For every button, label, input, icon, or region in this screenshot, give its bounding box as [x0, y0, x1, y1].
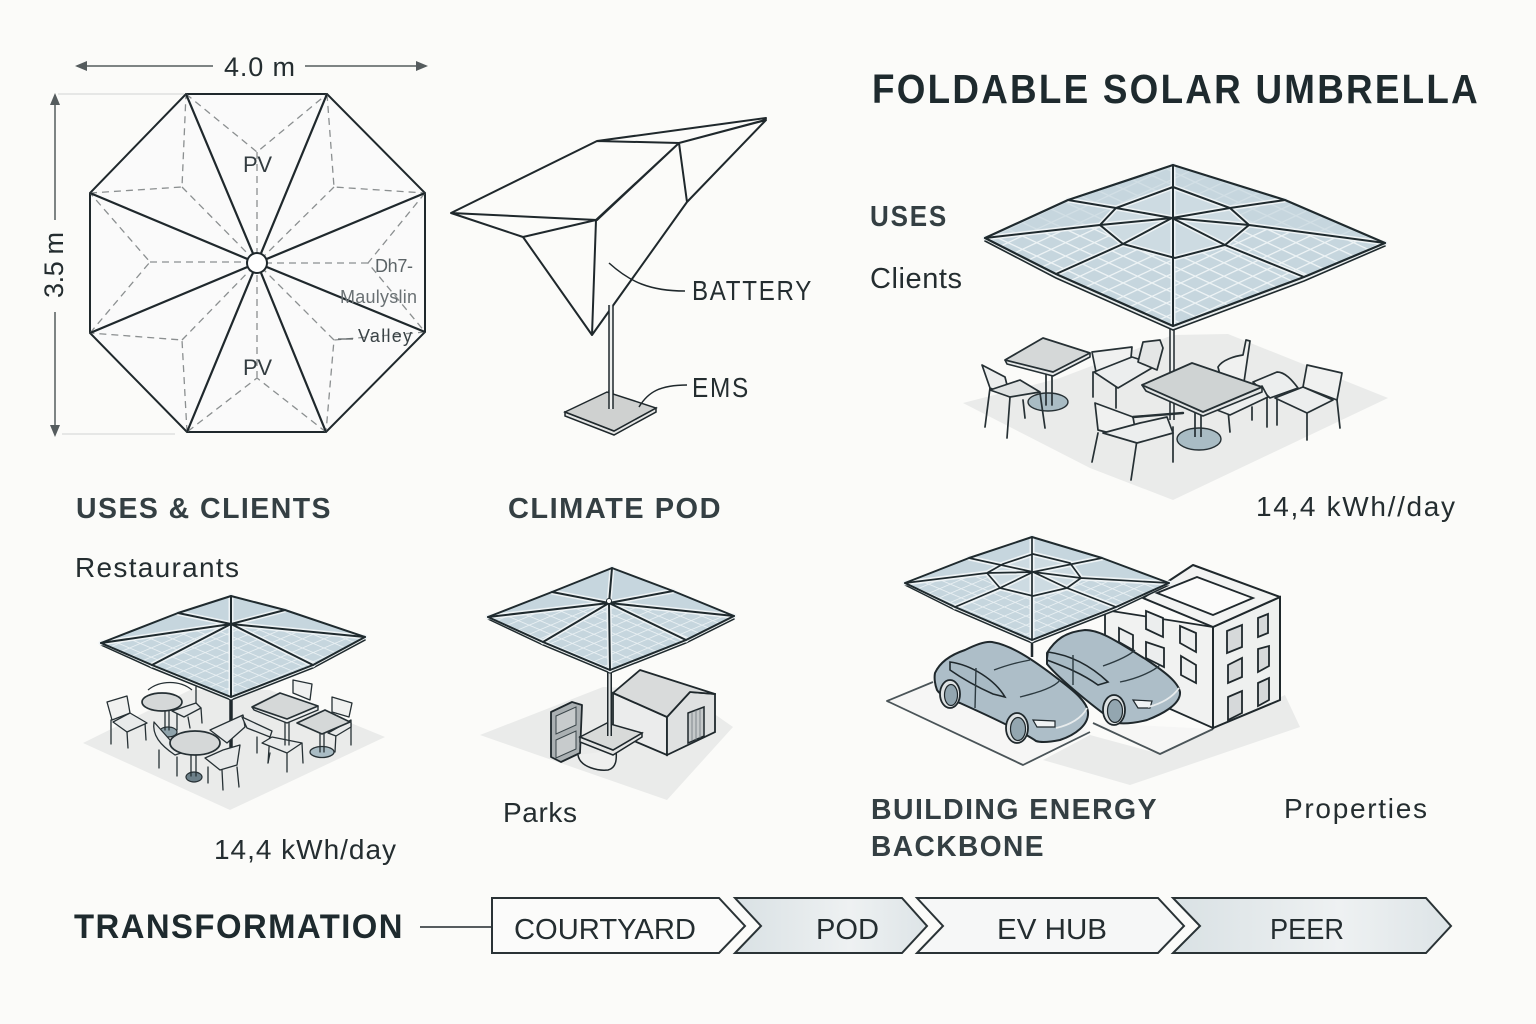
canopy with PV panels: [905, 537, 1169, 643]
canopy with PV panels: [101, 596, 365, 700]
table: centre: [1142, 363, 1262, 450]
car: rear: [1047, 630, 1180, 725]
ground shadow: [1043, 695, 1300, 785]
pole: [608, 305, 614, 409]
pole: [607, 668, 612, 736]
chair: far left: [107, 696, 147, 748]
dimension: height 3.5 m: 3.5 m: [39, 232, 69, 298]
folded canopy: [451, 118, 766, 335]
round table: front: [170, 731, 220, 782]
chevron: peer: [1173, 898, 1451, 953]
heading: uses and clients: USES & CLIENTS: [76, 493, 332, 525]
panel: climate pod umbrella: [480, 568, 734, 800]
chevron: pod: [735, 898, 927, 953]
pole: [229, 697, 233, 752]
building: [1105, 565, 1280, 728]
connector line: [420, 926, 492, 928]
label: restaurants: Restaurants: [75, 552, 239, 583]
panel: plan view with dimensions: [39, 52, 428, 437]
label: BATTERY: BATTERY: [692, 275, 813, 306]
car: front: [935, 642, 1088, 743]
heading: building energy backbone: BUILDING ENERGY: [871, 794, 1158, 826]
ground shadow: [480, 687, 733, 800]
label: Dh7: Dh7-: [375, 256, 413, 276]
dimension: width 4.0 m: [75, 52, 428, 82]
chevron: peer: PEER: [1270, 914, 1344, 946]
table: left: [1005, 338, 1090, 411]
chevron: pod: POD: [816, 914, 879, 946]
chair: right front: [262, 737, 303, 772]
canopy with PV panels: [488, 568, 734, 673]
label: EMS: EMS: [692, 372, 750, 403]
heading: transformation: TRANSFORMATION: [74, 908, 404, 946]
chair: lower middle: [205, 745, 240, 790]
chair: behind right of table: [1218, 340, 1250, 382]
pole: [1031, 640, 1033, 657]
panel: restaurant umbrella: [83, 596, 385, 810]
bench behind pole: [210, 715, 245, 743]
value: 14,4 kWh//day: 14,4 kWh//day: [1256, 491, 1455, 522]
label: parks: Parks: [503, 797, 577, 828]
chevron: courtyard: [492, 898, 745, 953]
chair: middle armchair: [1092, 340, 1163, 408]
label: Maulyslin: Maulyslin: [340, 287, 417, 307]
label: clients: Clients: [870, 263, 962, 295]
chair: behind round table: [172, 687, 202, 730]
heading: climate pod: CLIMATE POD: [508, 493, 722, 525]
base plate: [565, 390, 656, 435]
leader: EMS: [639, 385, 687, 407]
value: 14,4 kWh/day: 14,4 kWh/day: [214, 834, 396, 865]
parking pads: [887, 682, 1213, 765]
label: PV bottom: PV: [243, 355, 272, 380]
chair: left: [982, 365, 1045, 438]
chair: middle right: [242, 717, 272, 763]
chevron: ev hub: EV HUB: [997, 914, 1107, 946]
chevron: courtyard: COURTYARD: [514, 914, 696, 946]
leader: battery: [609, 263, 685, 291]
chair: lower left: [154, 722, 190, 776]
square table: large: [252, 693, 318, 745]
heading: building energy backbone: BACKBONE: [871, 831, 1045, 863]
chair: right: [1275, 365, 1342, 440]
chair: front armchair: [1092, 403, 1183, 480]
label: Valley: Valley: [358, 326, 412, 346]
chair: top back: [293, 680, 312, 700]
octagonal canopy plan: [90, 94, 425, 432]
panel: courtyard umbrella with tables: [963, 165, 1388, 500]
shed: [613, 670, 715, 755]
label: PV top: PV: [243, 152, 272, 177]
ground shadow: [963, 334, 1388, 500]
chair: right of table, seat and legs: [1217, 372, 1298, 432]
planter and base: [578, 723, 642, 770]
label: properties: Properties: [1284, 793, 1427, 824]
title: FOLDABLE SOLAR UMBRELLA: [872, 66, 1480, 112]
heading: uses: USES: [870, 201, 948, 233]
chevron process: [492, 898, 1451, 953]
dimension: height 3.5 m: [39, 93, 184, 437]
canopy with PV panels: [985, 165, 1385, 330]
square table: small: [297, 710, 350, 758]
heading: building energy backbone: [871, 794, 1158, 863]
panel: EV hub with building: [887, 537, 1300, 785]
chevron: ev hub: [917, 898, 1184, 953]
kiosk battery unit: [551, 702, 582, 762]
pole: [1169, 326, 1175, 420]
round table: back: [142, 682, 192, 737]
panel: folded umbrella diagram: [451, 118, 813, 435]
dimension: width 4.0 m: 4.0 m: [224, 52, 295, 82]
ground shadow: [83, 690, 385, 810]
chair: far right: [328, 697, 352, 752]
